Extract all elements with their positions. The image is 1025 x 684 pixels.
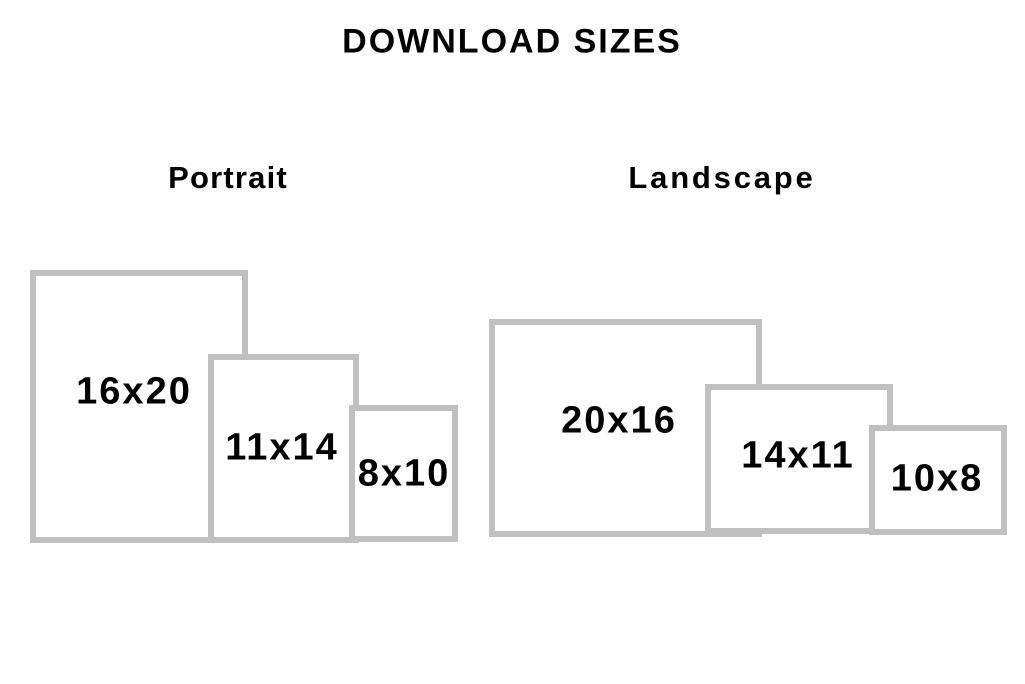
label: 20x16: 20x16 <box>561 400 677 442</box>
frame: 10x8 <box>869 425 1007 535</box>
heading: portrait: Portrait <box>168 160 288 195</box>
frame: 16x20 <box>30 270 248 543</box>
frame: 14x11 <box>705 384 893 534</box>
frame: 20x16 <box>489 319 762 537</box>
heading: landscape: Landscape <box>628 160 816 195</box>
label: 8x10: 8x10 <box>358 452 450 494</box>
label: 10x8: 10x8 <box>891 458 983 500</box>
frame: 11x14 <box>208 354 359 543</box>
title: DOWNLOAD SIZES <box>342 22 682 60</box>
label: 16x20: 16x20 <box>76 370 192 412</box>
frame: 8x10 <box>349 405 458 542</box>
label: 14x11: 14x11 <box>741 434 855 476</box>
label: 11x14: 11x14 <box>225 426 339 468</box>
